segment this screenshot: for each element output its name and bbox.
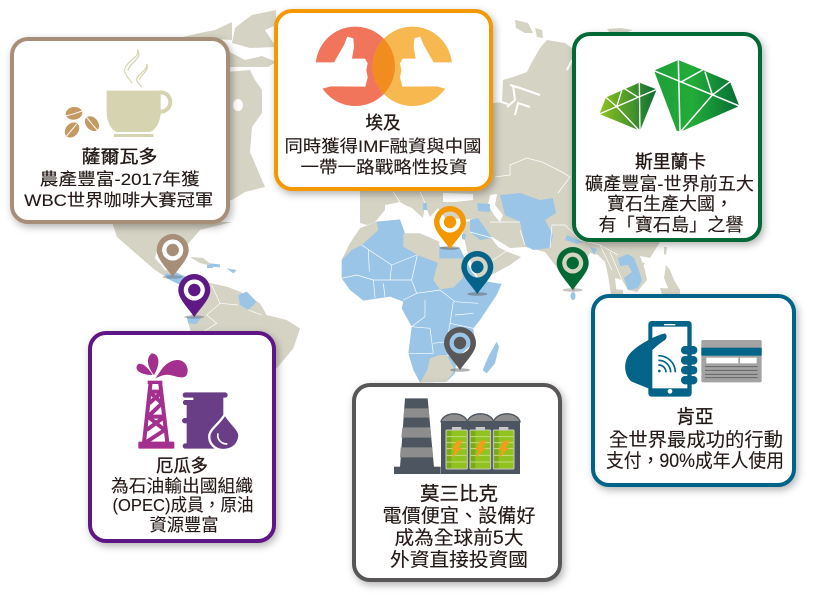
text: Mozambique: 電價便宜、設備好	[382, 505, 536, 527]
south america	[165, 263, 300, 373]
panel: El Salvador	[12, 39, 228, 222]
text: Kenya	[606, 406, 784, 472]
text: Egypt: 一帶一路戰略性投資	[300, 158, 468, 177]
panel: Mozambique	[354, 385, 560, 580]
panel: Egypt	[276, 11, 491, 189]
icon: coffee cup and beans	[62, 49, 170, 140]
text: Egypt: 埃及	[366, 113, 400, 133]
southeast asia islands	[613, 247, 680, 295]
icon: gemstones	[599, 60, 739, 132]
asia borders	[393, 192, 622, 280]
asia highlighted countries	[423, 193, 642, 290]
text: Kenya: 肯亞	[676, 406, 714, 428]
text: Mozambique	[382, 483, 536, 571]
pin: El Salvador	[157, 234, 189, 279]
text: El Salvador	[24, 147, 213, 210]
text: Sri Lanka	[585, 152, 754, 235]
text: Egypt	[284, 113, 482, 177]
text: Ecuador: 厄瓜多	[156, 456, 208, 476]
text: Kenya: 支付，90%成年人使用	[606, 450, 784, 472]
panel: Kenya	[593, 296, 794, 485]
icon: two thumbs up	[312, 27, 456, 106]
icon: power plant and batteries	[394, 398, 520, 474]
pin: Kenya	[461, 251, 493, 296]
panel: Ecuador	[90, 333, 274, 541]
text: Egypt: 同時獲得IMF融資與中國	[284, 137, 482, 156]
arctic islands	[515, 20, 633, 38]
text: Mozambique: 莫三比克	[420, 483, 498, 505]
africa	[342, 219, 502, 383]
world map	[112, 10, 740, 383]
text: Mozambique: 外資直接投資國	[390, 549, 528, 571]
north america	[112, 10, 276, 285]
pin: Sri Lanka	[557, 247, 589, 292]
text: Ecuador	[111, 456, 254, 535]
text: Kenya: 全世界最成功的行動	[609, 429, 783, 451]
pin: Mozambique	[444, 327, 476, 372]
text: Sri Lanka: 礦產豐富-世界前五大	[585, 174, 754, 194]
text: Ecuador: (OPEC)成員，原油	[112, 495, 254, 515]
pin: Egypt	[434, 206, 466, 250]
panel: Sri Lanka	[574, 34, 760, 240]
text: El Salvador: 農產豐富-2017年獲	[40, 170, 200, 189]
text: El Salvador: 薩爾瓦多	[82, 147, 158, 167]
text: Ecuador: 為石油輸出國組織	[111, 476, 253, 496]
text: Sri Lanka: 有「寶石島」之譽	[598, 215, 744, 235]
text: Sri Lanka: 斯里蘭卡	[635, 152, 706, 172]
icon: oil derrick and barrel	[136, 353, 239, 450]
pin: Ecuador	[178, 274, 210, 319]
text: Ecuador: 資源豐富	[150, 515, 218, 535]
arabian peninsula	[463, 233, 521, 278]
text: Mozambique: 成為全球前5大	[394, 527, 524, 549]
icon: phone payment and card	[625, 321, 762, 397]
eurasia	[360, 40, 740, 295]
text: Sri Lanka: 寶石生產大國，	[607, 194, 733, 214]
text: El Salvador: WBC世界咖啡大賽冠軍	[24, 190, 213, 210]
russia border	[495, 158, 570, 193]
inland seas and arctic gulfs	[443, 193, 503, 222]
